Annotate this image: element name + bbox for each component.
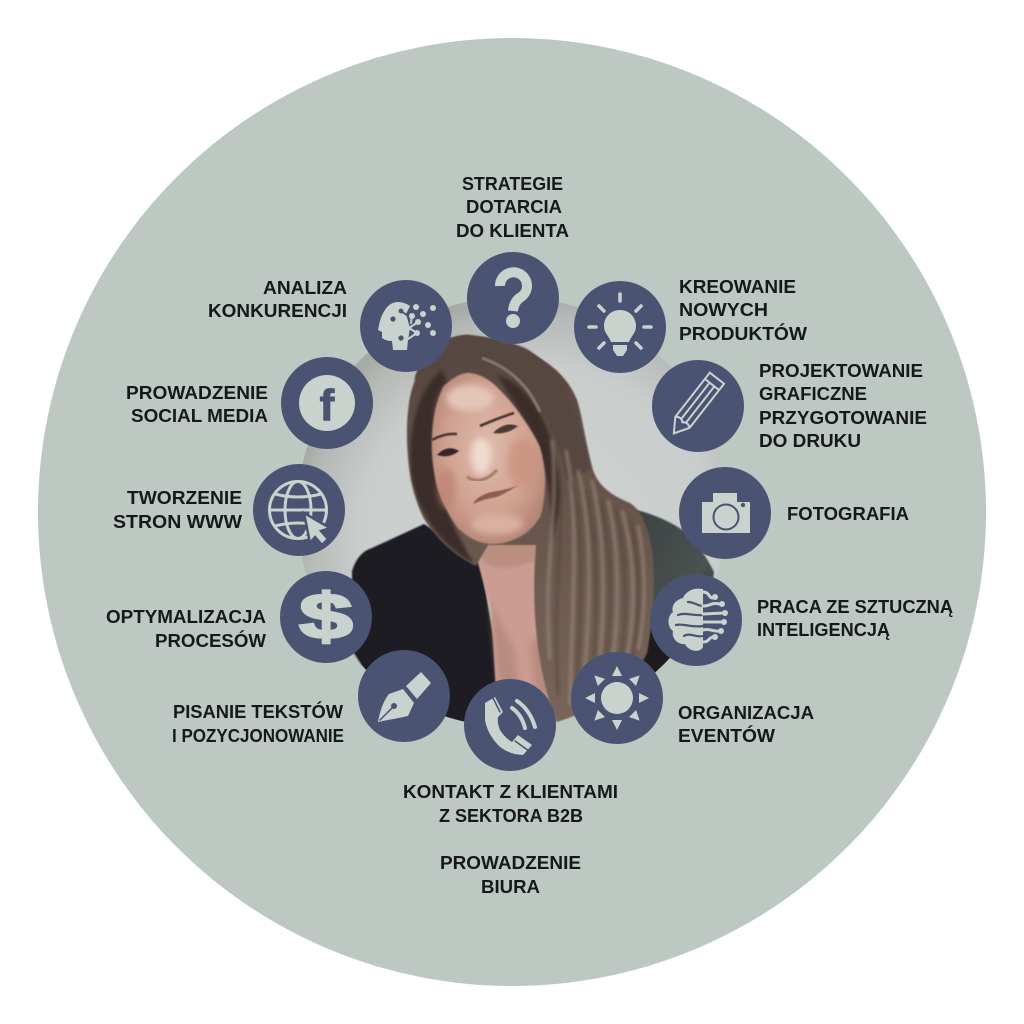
hair: light strand over crown [482,358,540,412]
mouth [473,485,518,504]
label: tworzenie stron www: TWORZENIE [127,488,242,508]
label: analiza konkurencji [208,278,347,321]
label: strategie dotarcia do klienta [456,174,569,241]
label: prowadzenie biura: PROWADZENIE [440,853,581,873]
right eye [493,425,518,433]
icon: dollar [280,571,372,663]
hair [407,335,654,722]
icon: facebook [281,357,373,449]
nose highlight [471,438,491,474]
label: prowadzenie biura [440,853,581,897]
right brow [480,413,514,426]
label: organizacja eventow [678,703,814,746]
neck [482,544,536,568]
label: praca ze sztuczna inteligencja [757,597,953,640]
nose shadow [467,470,497,480]
right cheek colour [507,438,537,486]
icon: facebook: f [320,381,335,430]
portrait photo [297,297,727,727]
label: kontakt z klientami [403,782,618,826]
label: pisanie tekstow [172,701,344,746]
hair mass [407,335,654,722]
photo backdrop [297,297,727,727]
blouse shading [486,606,550,701]
icon: pencil [652,360,744,452]
blouse [477,556,560,722]
icon: telephone [464,679,556,771]
label: kontakt z klientami: Z SEKTORA B2B [439,806,583,826]
label: strategie dotarcia do klienta: STRATEGIE [462,174,563,194]
icon: fountain pen [358,650,450,742]
label: prowadzenie biura: BIURA [481,877,540,897]
hair: darker strands [556,470,639,702]
chin highlight [471,514,523,534]
icon: brain [650,574,742,666]
label: optymalizacja procesow: PROCESÓW [155,630,266,651]
icon: light bulb [574,281,666,373]
label: kreowanie nowych produktow [679,277,807,344]
label: organizacja eventow: ORGANIZACJA [678,703,814,723]
icon: head with data [360,280,452,372]
forehead highlight [446,385,494,411]
hair: dark right panel [497,375,560,545]
label: tworzenie stron www: STRON WWW [113,512,242,532]
label: kreowanie nowych produktow: NOWYCH [679,300,768,320]
label: analiza konkurencji: ANALIZA [263,278,347,298]
left eye [437,448,459,456]
label: projektowanie graficzne: PROJEKTOWANIE [759,361,923,381]
left cheek colour [438,468,456,508]
label: projektowanie graficzne: GRAFICZNE [759,384,867,404]
hair: dark left strand [410,370,474,564]
jacket: dark lower right [643,626,670,672]
icon: question mark [467,252,559,344]
icon: dollar: $ [299,581,353,652]
label: strategie dotarcia do klienta: DOTARCIA [466,197,562,217]
label: prowadzenie social media: SOCIAL MEDIA [131,406,268,426]
label: prowadzenie social media: PROWADZENIE [126,383,268,403]
hair: crown tone [414,335,590,480]
label: optymalizacja procesow [106,607,266,651]
label: projektowanie graficzne: PRZYGOTOWANIE [759,408,927,428]
label: organizacja eventow: EVENTÓW [678,725,775,746]
jacket: right [636,509,715,672]
face [432,373,545,544]
hair: lighter strands [548,440,644,705]
label: kontakt z klientami: KONTAKT Z KLIENTAMI [403,782,618,802]
jacket: left [352,524,505,725]
label: praca ze sztuczna inteligencja: PRACA ZE SZTUCZNĄ [757,597,953,617]
label: tworzenie stron www [113,488,242,532]
label: pisanie tekstow: PISANIE TEKSTÓW [173,701,343,722]
label: analiza konkurencji: KONKURENCJI [208,301,347,321]
label: projektowanie graficzne: DO DRUKU [759,431,861,451]
icon: camera [679,467,771,559]
icon: globe with cursor [253,464,345,556]
label: praca ze sztuczna inteligencja: INTELIGENCJĄ [757,620,890,640]
label: optymalizacja procesow: OPTYMALIZACJA [106,607,266,627]
label: kreowanie nowych produktow: KREOWANIE [679,277,796,297]
face shape [432,373,545,544]
label: pisanie tekstow: I POZYCJONOWANIE [172,726,344,746]
label: prowadzenie social media [126,383,268,426]
left brow [432,434,457,440]
label: kreowanie nowych produktow: PRODUKTÓW [679,323,807,344]
label: projektowanie graficzne [759,361,927,451]
label: fotografia: FOTOGRAFIA [787,504,909,524]
service labels [106,174,953,897]
label: strategie dotarcia do klienta: DO KLIENTA [456,221,569,241]
icon: sun [571,652,663,744]
